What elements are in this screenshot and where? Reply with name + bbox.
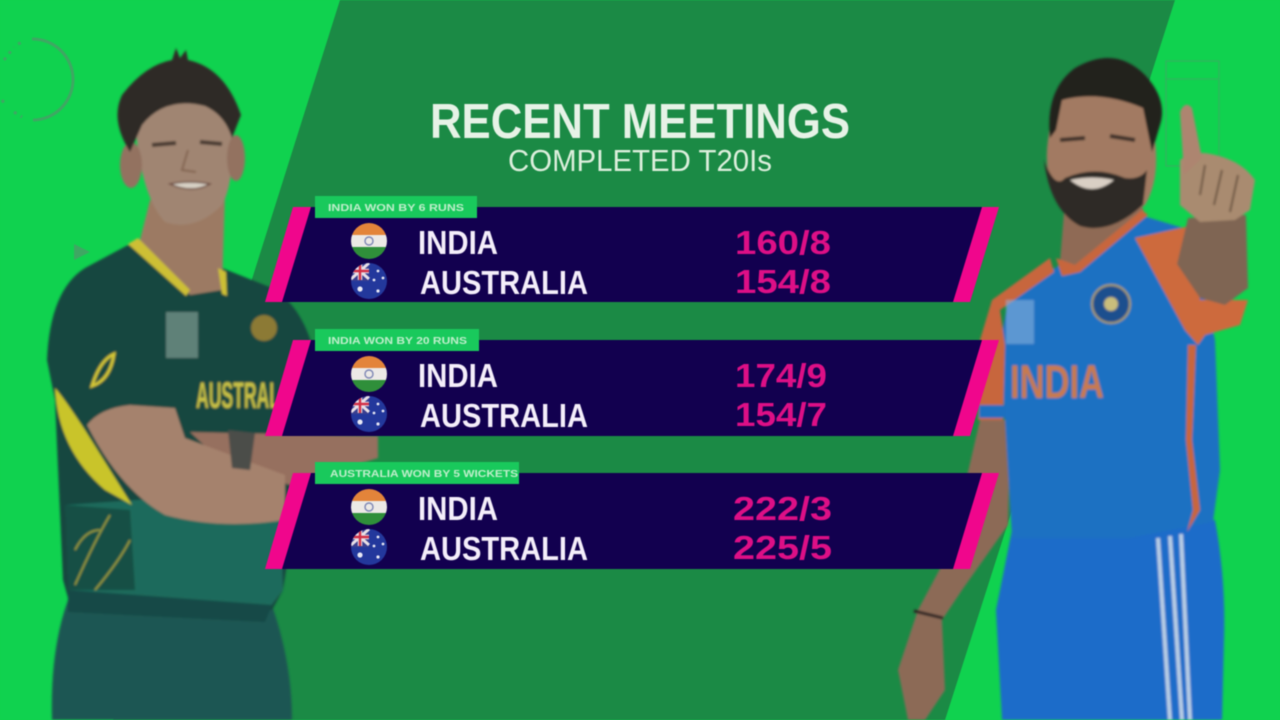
smile [1070,178,1114,189]
title: RECENT MEETINGS [430,95,850,149]
player: Australia [47,48,378,720]
eyes [152,142,222,145]
finger joints [1200,165,1238,212]
collar [128,238,190,296]
team: India: INDIA [418,490,498,527]
raised sleeve [1135,226,1248,345]
shirt [1000,215,1220,538]
score: Australia: 154/8 [735,263,831,300]
score: India: 174/9 [735,357,827,394]
hair [118,48,241,152]
far forearm [190,432,378,485]
decorative pitch outline [1166,61,1219,166]
forearm [1177,215,1248,305]
flag: India [351,489,387,525]
left shoulder trim [978,258,1054,420]
hair [1049,58,1162,152]
tournament logo [1006,300,1034,344]
decorative dashed circle [2,39,73,120]
subtitle: COMPLETED T20Is [508,143,772,178]
chest badges [166,312,198,358]
result tag [315,462,519,484]
panel: match 1 [265,196,999,302]
result tag [315,196,477,218]
yellow side panel [55,388,132,505]
shorts [52,600,292,720]
shorts [996,520,1224,720]
result tag [315,329,479,351]
collar [1056,210,1148,276]
waistband [68,590,272,622]
score: Australia: 154/7 [735,396,827,433]
sponsor swoosh [92,354,114,386]
team: Australia: AUSTRALIA [420,397,588,434]
neck [1060,200,1145,272]
flag: Australia [351,263,387,299]
mouth [170,182,210,189]
near arm [87,405,285,524]
flag: India [351,356,387,392]
right pink slash [953,340,999,436]
right pink slash [953,207,999,302]
score: India: 222/3 [733,490,832,527]
navy bar [272,473,990,569]
panel: match 3 [265,462,999,569]
shirt [47,245,312,610]
flag: India [351,223,387,259]
shirt side detail [65,505,135,590]
panel: match 2 [265,329,999,436]
left pink slash [265,473,311,569]
shirt text: INDIA [1010,355,1104,408]
nose [182,150,196,172]
ears [120,142,142,188]
eyes [1060,136,1135,140]
gold pattern lines [75,515,130,590]
left pink slash [265,340,311,436]
left pink slash [265,207,311,302]
player: Australia: AUSTRAL [196,375,280,416]
lowered arm and hand [898,420,1010,720]
team: Australia: AUSTRALIA [420,530,588,567]
flag: Australia [351,529,387,565]
stripes [1158,534,1190,720]
watch [228,430,255,470]
head [135,89,233,225]
team: India: INDIA [418,224,498,261]
navy bar [272,340,990,436]
left cuff [979,405,1006,418]
fist [1180,153,1255,222]
beard [1044,160,1147,228]
side stripe [1186,345,1200,532]
team: India: INDIA [418,357,498,394]
result tag: AUSTRALIA WON BY 5 WICKETS [330,468,518,480]
result tag: INDIA WON BY 20 RUNS [328,335,467,347]
decorative triangle [74,244,90,260]
badge [1092,285,1130,323]
player: India [898,58,1255,720]
result tag: INDIA WON BY 6 RUNS [328,202,464,214]
flag: Australia [351,396,387,432]
finger [1180,105,1202,175]
navy bar [272,207,990,302]
head [1047,80,1156,224]
score: Australia: 225/5 [733,529,832,566]
shirt lower pattern [65,490,283,607]
bracelet [914,611,943,618]
score: India: 160/8 [735,224,831,261]
neck [140,195,225,295]
team: Australia: AUSTRALIA [420,264,588,301]
right pink slash [953,473,999,569]
